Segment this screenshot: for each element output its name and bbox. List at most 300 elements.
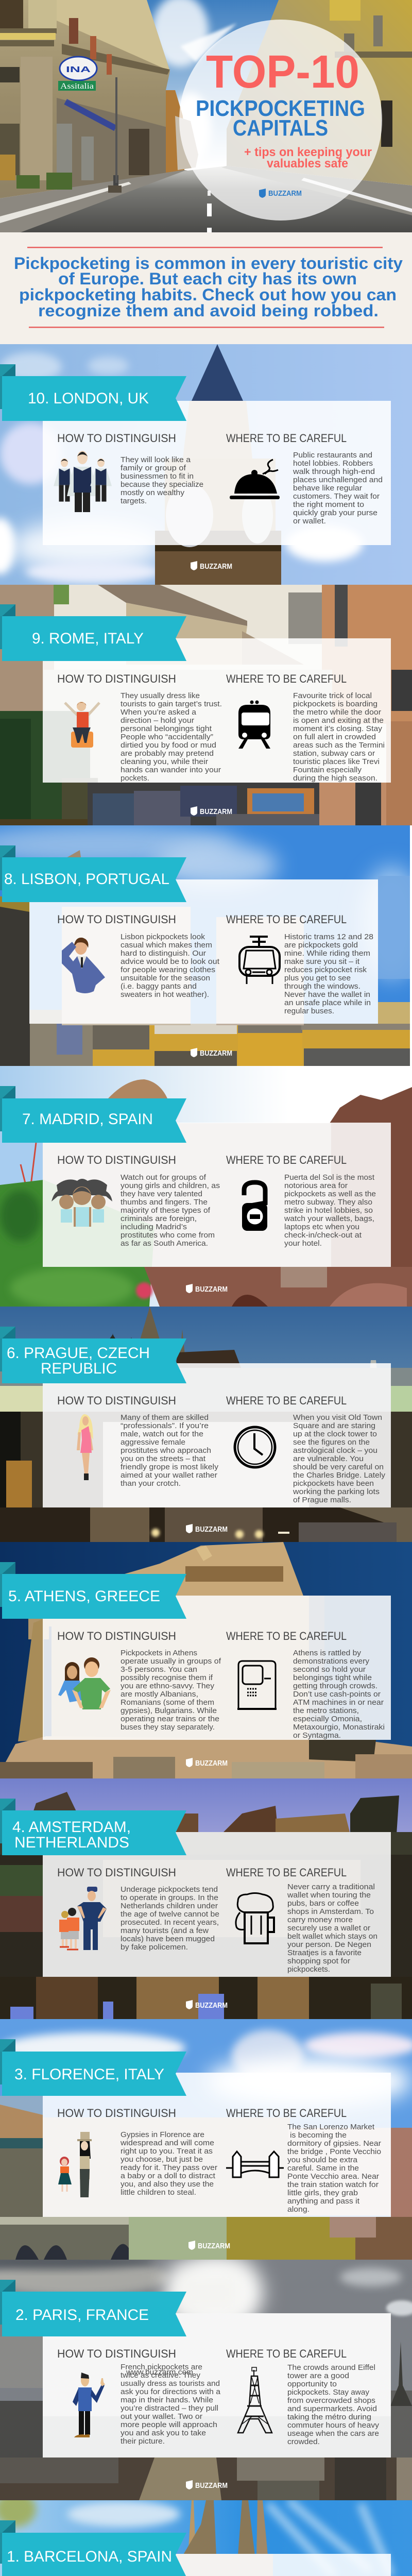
- text: Rome distinguish: When you’re asked a: [121, 708, 197, 717]
- text: Florence distinguish: right up to you. Treat it as: [121, 2147, 213, 2156]
- logo: buzzarm: [186, 1284, 228, 1294]
- logo: hero buzzarm: [259, 189, 302, 198]
- text: Athens careful: second so hold your: [293, 1665, 366, 1674]
- ribbon: 3 Florence: 3. FLORENCE, ITALY: [14, 2066, 164, 2083]
- text: Lisbon distinguish: (i.e. baggy pants and: [121, 982, 197, 991]
- text: Athens careful: [293, 1649, 385, 1740]
- text: Rome careful: Favourite trick of local: [293, 691, 372, 700]
- text: Amsterdam careful: wallet when touring the: [287, 1891, 371, 1900]
- text: Paris careful: taking the métro during: [287, 2413, 371, 2421]
- text: Athens distinguish: you are ethno-savvy. They: [121, 1682, 215, 1690]
- heading: how to distinguish: HOW TO DISTINGUISH: [57, 1630, 176, 1642]
- photo: Paris skyline: [0, 2260, 412, 2500]
- text: Florence careful: little girls, they grab: [287, 2189, 358, 2197]
- text: Lisbon distinguish: Lisbon pickpockets look: [121, 933, 205, 941]
- icon: woman with hat and child: [58, 2132, 92, 2197]
- text: Madrid distinguish: they have very talented: [121, 1190, 202, 1198]
- text: Paris distinguish: more people will approach: [121, 2420, 217, 2429]
- ribbon: 6 Prague: [0, 1327, 186, 1383]
- text: Florence distinguish: widespread and will come: [120, 2139, 214, 2147]
- logo: buzzarm: [191, 806, 232, 816]
- text: Athens careful: Don’t use cash-points or: [293, 1690, 381, 1699]
- text: Florence distinguish: little children to steal.: [121, 2188, 196, 2197]
- text: Florence distinguish: a baby or a doll to distract: [121, 2172, 216, 2180]
- text: London careful: behave like regular: [293, 484, 362, 493]
- text: Madrid careful: metro subway. They also: [284, 1198, 372, 1207]
- text: Prague distinguish: Many of them are skilled: [121, 1413, 209, 1422]
- text: Paris careful: from overcrowded shops: [287, 2396, 375, 2405]
- text: Athens careful: Metaxourgio, Monastiraki: [293, 1723, 385, 1732]
- text: Amsterdam distinguish: the age of twelve cannot be: [121, 1910, 219, 1919]
- section: 3 Florence: [0, 2019, 412, 2260]
- text: Athens distinguish: buses they stay separately.: [121, 1723, 215, 1732]
- text: Lisbon careful: Never have the wallet in: [284, 990, 370, 999]
- ribbon: 7 Madrid: 7. MADRID, SPAIN: [22, 1111, 153, 1128]
- text: Lisbon careful: make sure you sit – it: [284, 957, 360, 966]
- text: Paris distinguish: French pickpockets are: [121, 2363, 202, 2371]
- text: Rome careful: station, subway cars or: [293, 749, 375, 758]
- text: Lisbon careful: plus you get to see: [284, 974, 351, 982]
- ribbon: 1 Barcelona: [0, 2520, 186, 2576]
- text: Rome distinguish: cleaning you, while their: [121, 757, 208, 766]
- panel: Amsterdam card: [43, 1832, 391, 1977]
- heading: how to distinguish: HOW TO DISTINGUISH: [57, 2347, 176, 2360]
- section: 1 Barcelona: [0, 2491, 412, 2576]
- text: Prague careful: When you visit Old Town: [293, 1413, 382, 1422]
- section: 8 Lisbon: [0, 824, 412, 1066]
- text: Madrid careful: laptops etc when you: [284, 1223, 359, 1231]
- text: Lisbon careful: through the windows.: [284, 982, 360, 991]
- text: Paris careful: tower are a good: [287, 2371, 349, 2380]
- text: London distinguish: mostly on wealthy: [121, 488, 185, 497]
- panel: Madrid card: [43, 1123, 391, 1267]
- text: Rome careful: the metro while the door: [293, 708, 381, 717]
- photo: Amsterdam canal houses: [0, 1778, 412, 2019]
- text: Rome careful: Fountain especially: [293, 766, 362, 774]
- text: Paris distinguish: you’re distracted – they pull: [121, 2404, 218, 2413]
- text: Athens distinguish: operate usually in groups of: [121, 1657, 221, 1666]
- text: London careful: walk through high-end: [293, 467, 375, 476]
- title: PICKPOCKETING: [196, 96, 365, 121]
- text: Athens careful: especially Omonia,: [293, 1715, 362, 1723]
- icon: cloche: [230, 460, 280, 499]
- icon: beer mug: [236, 1893, 274, 1943]
- text: Florence careful: the bridge , Ponte Vecchio: [287, 2147, 381, 2156]
- text: London distinguish: They will look like a: [121, 455, 191, 464]
- text: London distinguish: businessmen to fit in: [121, 472, 194, 481]
- text: Athens careful: Athens is rattled by: [293, 1649, 362, 1657]
- text: Lisbon careful: an unsafe place while in: [284, 998, 371, 1007]
- ribbon: 6 Prague: 6. PRAGUE, CZECH: [7, 1345, 150, 1362]
- text: Florence distinguish: ready for it. They pass over: [121, 2163, 217, 2172]
- ribbon: 2 Paris: [0, 2280, 186, 2336]
- text: Rome distinguish: People who “accidentally”: [121, 733, 213, 741]
- text: Prague careful: up at the clock tower to: [293, 1430, 377, 1438]
- icon: man with glasses: [73, 2372, 105, 2437]
- text: Athens careful: or Syntagma.: [293, 1731, 341, 1740]
- heading: how to distinguish: HOW TO DISTINGUISH: [57, 1394, 176, 1407]
- heading: how to distinguish: HOW TO DISTINGUISH: [57, 2107, 176, 2120]
- text: Athens careful: getting through crowds.: [293, 1682, 377, 1690]
- logo: buzzarm: BUZZARM: [198, 2242, 230, 2250]
- panel: intro: of Europe. But each city has its own: [58, 269, 357, 288]
- logo: buzzarm: [191, 1048, 232, 1058]
- text: Athens distinguish: [121, 1649, 221, 1732]
- panel: Prague card: [43, 1363, 391, 1507]
- text: Amsterdam distinguish: Netherlands children under: [121, 1902, 218, 1910]
- ribbon: 4 Amsterdam: NETHERLANDS: [14, 1834, 129, 1851]
- text: Lisbon careful: reduces pickpocket risk: [284, 965, 367, 974]
- ribbon: 8 Lisbon: [0, 845, 186, 902]
- photo: Florence villa and clouds: [0, 2019, 412, 2260]
- icon: businessmen: [54, 451, 112, 512]
- text: Amsterdam distinguish: locals) have been mugged: [121, 1935, 215, 1943]
- text: Prague distinguish: you on the streets – that: [121, 1454, 206, 1463]
- text: Athens careful: demonstrations every: [293, 1657, 370, 1666]
- text: Madrid distinguish: criminals are foreign,: [121, 1214, 197, 1223]
- heading: where to be careful: WHERE TO BE CAREFUL: [226, 2107, 347, 2120]
- text: Lisbon careful: are pickpockets gold: [284, 941, 358, 950]
- panel: London card: [43, 401, 391, 545]
- text: Prague careful: see the figures on the: [293, 1438, 370, 1447]
- text: Paris careful: and supermarkets. Avoid: [287, 2404, 377, 2413]
- icon: Ponte Vecchio bridge: [226, 2151, 284, 2177]
- text: Prague careful: the Charles Bridge. Lately: [293, 1471, 386, 1480]
- photo: Sagrada Familia: [0, 2500, 412, 2576]
- text: Madrid careful: strike in hotel lobbies, so: [284, 1206, 373, 1215]
- text: Rome distinguish: personal belongings tight: [121, 724, 212, 733]
- text: Madrid distinguish: [121, 1173, 220, 1248]
- photo: Prague castle and bridge: [0, 1307, 412, 1542]
- text: Madrid distinguish: as far as South America.: [121, 1239, 208, 1248]
- text: Rome careful: [293, 691, 385, 783]
- text: Rome distinguish: dirtied you by food or mud: [121, 741, 216, 750]
- text: Paris distinguish: out your wallet. Two or: [121, 2412, 202, 2421]
- text: Florence careful: The San Lorenzo Market: [287, 2123, 375, 2131]
- title: + tips on keeping your: [244, 145, 372, 159]
- text: Madrid distinguish: thumbs and fingers. The: [121, 1198, 208, 1207]
- text: Athens distinguish: Pickpockets in Athens: [121, 1649, 197, 1657]
- heading: how to distinguish: HOW TO DISTINGUISH: [57, 1866, 176, 1879]
- text: Prague careful: working the parking lots: [293, 1487, 380, 1496]
- text: Paris distinguish: [121, 2363, 221, 2446]
- heading: how to distinguish: HOW TO DISTINGUISH: [57, 672, 176, 685]
- text: Athens distinguish: gypsies), Bulgarians. While: [121, 1706, 217, 1715]
- text: Paris careful: crowded.: [287, 2437, 320, 2446]
- text: Lisbon careful: [284, 933, 373, 1015]
- icon: clock: [235, 1427, 275, 1467]
- text: Madrid careful: notorious area for: [284, 1181, 348, 1190]
- text: Florence careful: is becoming the: [290, 2131, 347, 2140]
- section: 7 Madrid: [0, 1066, 412, 1309]
- text: Prague careful: astrological clock – you: [293, 1446, 377, 1455]
- text: Amsterdam distinguish: Underage pickpockets tend: [121, 1885, 218, 1894]
- text: Rome distinguish: They usually dress like: [121, 691, 200, 700]
- text: London distinguish: targets.: [121, 497, 147, 505]
- text: Madrid careful: your hotel.: [284, 1239, 322, 1248]
- logo: buzzarm: [188, 2241, 230, 2250]
- circle: translucent title backdrop: [179, 20, 382, 221]
- text: Rome careful: during the high season.: [293, 774, 377, 783]
- heading: where to be careful: WHERE TO BE CAREFUL: [226, 1630, 347, 1642]
- text: Prague careful: pickpockets have been: [293, 1479, 374, 1488]
- panel: Athens card: [43, 1596, 391, 1740]
- text: Lisbon careful: regular buses.: [284, 1007, 334, 1015]
- ribbon: 5 Athens: [0, 1562, 186, 1619]
- panel: Lisbon card: [29, 879, 378, 1024]
- text: Lisbon distinguish: hard to distinguish. Our: [121, 949, 206, 958]
- text: Lisbon careful: mine. While riding them: [284, 949, 370, 958]
- text: Florence distinguish: you choose, but just be: [121, 2155, 203, 2164]
- heading: where to be careful: WHERE TO BE CAREFUL: [226, 1866, 347, 1879]
- text: Madrid distinguish: majority of these types of: [121, 1206, 211, 1215]
- logo: buzzarm: [191, 561, 232, 571]
- text: Prague distinguish: male, watch out for the: [121, 1430, 203, 1438]
- text: Lisbon distinguish: unsuitable for the season: [121, 974, 210, 982]
- text: Rome careful: pickpockets is boarding: [293, 700, 377, 708]
- ribbon: 2 Paris: 2. PARIS, FRANCE: [15, 2307, 149, 2324]
- logo: buzzarm: BUZZARM: [195, 1525, 228, 1534]
- logo: buzzarm: BUZZARM: [195, 2481, 228, 2490]
- text: London careful: or wallet.: [293, 517, 326, 526]
- ribbon: 9 Rome: 9. ROME, ITALY: [32, 630, 144, 647]
- icon: tram: [239, 937, 280, 984]
- icon: man scratching head: [62, 938, 105, 993]
- text: London careful: hotel lobbies. Robbers: [293, 459, 373, 468]
- ribbon: 4 Amsterdam: 4. AMSTERDAM,: [12, 1819, 131, 1836]
- text: Prague careful: [293, 1413, 386, 1504]
- logo: buzzarm: [186, 2000, 228, 2010]
- heading: where to be careful: WHERE TO BE CAREFUL: [226, 2347, 347, 2360]
- text: Madrid distinguish: Watch out for groups of: [121, 1173, 207, 1182]
- text: Florence careful: [287, 2123, 381, 2214]
- text: Rome careful: areas such as the Termini: [293, 741, 385, 750]
- ribbon: 6 Prague: REPUBLIC: [41, 1360, 117, 1377]
- text: Amsterdam careful: [287, 1883, 377, 1974]
- ribbon: 5 Athens: 5. ATHENS, GREECE: [8, 1588, 160, 1605]
- text: Amsterdam careful: pickpockets.: [287, 1965, 330, 1974]
- icon: tourist on suitcase: [65, 702, 99, 748]
- text: Rome careful: on full alert in crowded: [293, 733, 376, 741]
- text: Florence careful: anything and pass it: [287, 2197, 360, 2206]
- ribbon: 10 London: [0, 364, 186, 421]
- text: Rome distinguish: [121, 691, 222, 783]
- panel: hero street photo: Assitalia: [60, 82, 94, 91]
- ribbon: 7 Madrid: [0, 1086, 186, 1143]
- icon: Eiffel tower: [238, 2367, 272, 2433]
- text: Prague careful: of Prague malls.: [293, 1496, 351, 1504]
- text: Amsterdam careful: belt wallet which stays on: [287, 1932, 377, 1941]
- text: Rome careful: moment it’s closing. Stay: [293, 724, 383, 733]
- heading: how to distinguish: HOW TO DISTINGUISH: [57, 1154, 176, 1166]
- text: Madrid careful: Puerta del Sol is the most: [284, 1173, 375, 1182]
- text: Paris distinguish: twice as creative. They: [121, 2371, 200, 2380]
- text: Madrid distinguish: young girls and children, as: [121, 1181, 220, 1190]
- text: London distinguish: family or group of: [121, 464, 186, 472]
- text: Prague distinguish: aggressive female: [121, 1438, 185, 1447]
- text: Florence distinguish: you, and also they use the: [121, 2180, 214, 2189]
- text: Prague distinguish: aimed at your wallet rather: [121, 1471, 217, 1480]
- text: Athens distinguish: possibly recognise them if: [121, 1673, 213, 1682]
- text: Lisbon distinguish: [121, 933, 220, 999]
- text: Rome distinguish: are probably may pretend: [121, 749, 214, 758]
- text: Madrid distinguish: including Madrid’s: [121, 1223, 187, 1231]
- heading: how to distinguish: HOW TO DISTINGUISH: [57, 432, 176, 445]
- text: Florence careful: careful. Same in the: [287, 2164, 359, 2173]
- title: valuables safe: [267, 157, 348, 171]
- section: 5 Athens: [0, 1542, 412, 1778]
- text: Amsterdam careful: shops in Amsterdam. To: [287, 1907, 374, 1916]
- text: Athens distinguish: Romanians (some of them: [121, 1698, 214, 1707]
- text: London careful: the right moment to: [293, 500, 364, 509]
- ribbon: 10 London: 10. LONDON, UK: [28, 390, 149, 407]
- ribbon: 1 Barcelona: 1. BARCELONA, SPAIN: [7, 2548, 172, 2565]
- text: Amsterdam distinguish: to operate in groups. In the: [121, 1893, 218, 1902]
- icon: smiling couple: [58, 1657, 111, 1709]
- text: Paris careful: The crowds around Eiffel: [287, 2363, 375, 2372]
- section: 9 Rome: [0, 585, 412, 825]
- photo: Big Ben: [0, 344, 412, 585]
- text: Amsterdam careful: securely use a wallet or: [287, 1924, 370, 1933]
- text: Paris distinguish: map in their hands. While: [121, 2396, 213, 2404]
- text: Athens careful: ATM machines in or near: [293, 1698, 384, 1707]
- heading: how to distinguish: HOW TO DISTINGUISH: [57, 913, 176, 926]
- icon: policeman and children: [59, 1887, 107, 1950]
- text: Lisbon distinguish: sweaters in hot weather).: [121, 990, 209, 999]
- heading: where to be careful: WHERE TO BE CAREFUL: [226, 672, 347, 685]
- text: Amsterdam careful: shopping spot for: [287, 1957, 350, 1965]
- ribbon: 3 Florence: [0, 2039, 186, 2096]
- text: Lisbon distinguish: casual which makes them: [121, 941, 212, 950]
- text: Prague careful: should be very careful on: [293, 1463, 384, 1471]
- heading: where to be careful: WHERE TO BE CAREFUL: [226, 1154, 347, 1166]
- ribbon: 4 Amsterdam: [0, 1799, 186, 1855]
- text: Lisbon distinguish: advice would be to look out: [121, 957, 220, 966]
- text: Paris distinguish: their picture.: [121, 2437, 165, 2446]
- text: Amsterdam careful: Never carry a traditional: [287, 1883, 375, 1891]
- panel: Florence card: [43, 2073, 391, 2217]
- text: Amsterdam careful: pubs, bars or coffee: [287, 1899, 359, 1908]
- panel: intro: recognize them and avoid being robbed.: [38, 301, 379, 320]
- title: TOP-10: [206, 46, 359, 98]
- text: Paris careful: pickpockets. Stay away: [287, 2388, 370, 2397]
- panel: intro: [0, 232, 412, 344]
- text: London careful: places unchallenged and: [293, 476, 383, 484]
- text: Paris careful: useage when the cars are: [287, 2429, 379, 2438]
- photo: Rome street: [0, 585, 412, 825]
- text: Paris distinguish: usually dress as tourists and: [121, 2379, 220, 2388]
- text: Prague careful: Square and are staring: [293, 1421, 375, 1430]
- logo: buzzarm: [186, 1758, 228, 1768]
- text: Prague distinguish: friendly grope is most likely: [121, 1463, 219, 1471]
- heading: where to be careful: WHERE TO BE CAREFUL: [226, 913, 347, 926]
- text: Rome distinguish: hands can wander into your: [121, 766, 221, 774]
- text: Prague distinguish: “professionals”. If you’re: [121, 1421, 209, 1430]
- photo: Parthenon: [0, 1542, 412, 1778]
- text: Prague distinguish: [121, 1413, 219, 1488]
- logo: hero buzzarm: BUZZARM: [268, 189, 302, 198]
- logo: buzzarm: BUZZARM: [200, 1049, 232, 1058]
- text: Madrid careful: check-in/check-out at: [284, 1231, 362, 1240]
- text: Madrid careful: pickpockets as well as the: [284, 1190, 376, 1198]
- text: Lisbon distinguish: for people wearing clothes: [121, 965, 215, 974]
- title: CAPITALS: [233, 115, 328, 141]
- panel: intro: Pickpocketing is common in every touristic city: [14, 254, 403, 273]
- panel: Rome card: [43, 638, 391, 783]
- text: London careful: quickly grab your purse: [293, 509, 377, 517]
- logo: buzzarm: [186, 1524, 228, 1534]
- logo: buzzarm: BUZZARM: [200, 807, 232, 816]
- text: Madrid careful: [284, 1173, 376, 1248]
- text: Athens distinguish: 3-5 persons. You can: [121, 1665, 197, 1674]
- text: London careful: customers. They wait for: [293, 492, 380, 501]
- text: Prague distinguish: prostitutes who approach: [121, 1446, 211, 1455]
- logo: buzzarm: [186, 2480, 228, 2490]
- icon: ATM: [237, 1661, 277, 1709]
- text: London careful: Public restaurants and: [293, 451, 372, 460]
- heading: where to be careful: WHERE TO BE CAREFUL: [226, 1394, 347, 1407]
- text: Athens careful: belongings tight while: [293, 1673, 372, 1682]
- text: Florence careful: dormitory of gipsies. Near: [287, 2139, 381, 2148]
- text: Athens careful: the metro stations,: [293, 1706, 359, 1715]
- text: Amsterdam distinguish: prosecuted. In recent years,: [121, 1918, 219, 1927]
- text: Amsterdam distinguish: many tourists (and a few: [121, 1926, 209, 1935]
- text: Paris careful: [287, 2363, 380, 2446]
- ribbon: 8 Lisbon: 8. LISBON, PORTUGAL: [4, 871, 169, 888]
- section: 2 Paris: [0, 2254, 412, 2500]
- ribbon: 9 Rome: [0, 604, 186, 661]
- text: Paris careful: commuter hours of heavy: [287, 2421, 380, 2430]
- section: 6 Prague: [0, 1307, 412, 1542]
- text: Athens distinguish: operating near trains or the: [121, 1715, 219, 1723]
- section: 4 Amsterdam: [0, 1778, 412, 2019]
- text: Paris distinguish: www.buzzarm.com: [126, 2368, 193, 2377]
- text: Athens distinguish: are mostly Albanians,: [121, 1690, 198, 1699]
- text: Florence distinguish: [120, 2130, 217, 2197]
- icon: door hanger: [242, 1182, 267, 1231]
- text: Amsterdam distinguish: by fake policemen.: [121, 1943, 188, 1952]
- photo: Madrid building and flowers: [0, 1066, 412, 1307]
- text: Amsterdam careful: your person. De Negen: [287, 1940, 371, 1949]
- text: Lisbon careful: Historic trams 12 and 28: [284, 933, 373, 941]
- text: Paris distinguish: you and ask you to take: [121, 2429, 206, 2437]
- text: Paris careful: opportunity to: [287, 2380, 337, 2388]
- section: 10 London: [0, 344, 412, 585]
- text: Florence distinguish: Gypsies in Florence are: [121, 2130, 204, 2139]
- text: Florence careful: Ponte Vecchio area. Near: [287, 2172, 379, 2181]
- heading: where to be careful: WHERE TO BE CAREFUL: [226, 432, 347, 445]
- text: Madrid distinguish: prostitutes who come from: [121, 1231, 215, 1240]
- text: Amsterdam careful: carry money more: [287, 1916, 353, 1924]
- text: Florence careful: the train station watch for: [287, 2180, 379, 2189]
- text: Prague careful: are vulnerable. You: [293, 1454, 364, 1463]
- text: Amsterdam distinguish: [121, 1885, 219, 1952]
- panel: intro: pickpocketing habits. Check out how you can: [19, 285, 397, 304]
- text: Rome careful: touristic places like Trevi: [293, 757, 380, 766]
- logo: buzzarm: BUZZARM: [195, 1285, 228, 1294]
- text: London distinguish: because they specialize: [121, 480, 203, 489]
- text: Paris distinguish: ask you for directions with a: [121, 2387, 221, 2396]
- text: Rome careful: is open and exiting at the: [293, 716, 384, 725]
- logo: buzzarm: BUZZARM: [200, 562, 232, 571]
- logo: buzzarm: BUZZARM: [195, 1759, 228, 1768]
- panel: hero street photo: INA: [66, 65, 91, 74]
- text: Prague distinguish: than your crotch.: [121, 1479, 181, 1488]
- text: London distinguish: [121, 455, 203, 505]
- panel: Barcelona card: [43, 2554, 391, 2576]
- icon: train: [238, 701, 270, 749]
- text: Madrid careful: watch your wallets, bags,: [284, 1214, 374, 1223]
